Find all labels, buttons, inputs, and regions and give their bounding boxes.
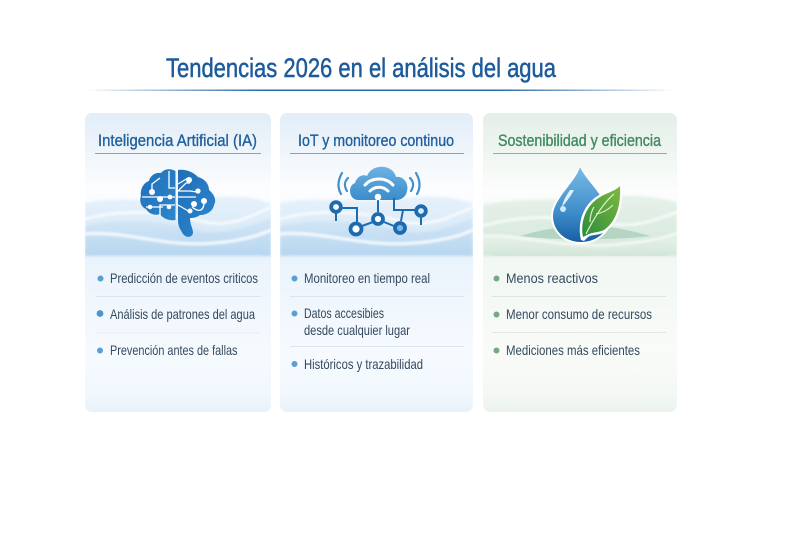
list item: Menos reactivos: Menos reactivos	[506, 271, 598, 286]
list item: Monitoreo: Monitoreo en tiempo real	[304, 270, 430, 286]
list item: Menor consumo: Menor consumo de recursos	[506, 306, 652, 322]
list item: Predicción: Predicción de eventos criticos	[110, 270, 258, 286]
list item: Históricos: Históricos y trazabilidad	[304, 356, 423, 372]
background waves	[85, 197, 271, 256]
list item: Análisis: Análisis de patrones del agua	[110, 306, 255, 322]
background waves	[483, 196, 677, 256]
list item: Mediciones: Mediciones más eficientes	[506, 342, 640, 358]
icon: IoT cloud network	[331, 167, 426, 234]
list item: Datos accesibles: desde cualquier lugar	[304, 322, 410, 338]
background waves	[280, 197, 473, 256]
list item: Datos accesibles: Datos accesibies	[304, 305, 384, 321]
title: Tendencias 2026 en el análisis del agua	[166, 53, 556, 83]
panel: Inteligencia Artificial	[85, 113, 271, 412]
icon: water drop with leaf	[551, 165, 622, 244]
title underline	[85, 90, 675, 91]
panel: IoT y monitoreo continuo	[280, 113, 473, 412]
heading: Inteligencia Artificial (IA)	[98, 132, 257, 150]
list item: Datos accesibles	[292, 305, 410, 338]
heading: Sostenibilidad y eficiencia	[498, 132, 662, 150]
list item: Prevención: Prevención antes de fallas	[110, 342, 238, 358]
panel: Sostenibilidad y eficiencia	[483, 113, 677, 412]
icon: brain circuit	[140, 169, 215, 237]
heading: IoT y monitoreo continuo	[298, 132, 454, 150]
